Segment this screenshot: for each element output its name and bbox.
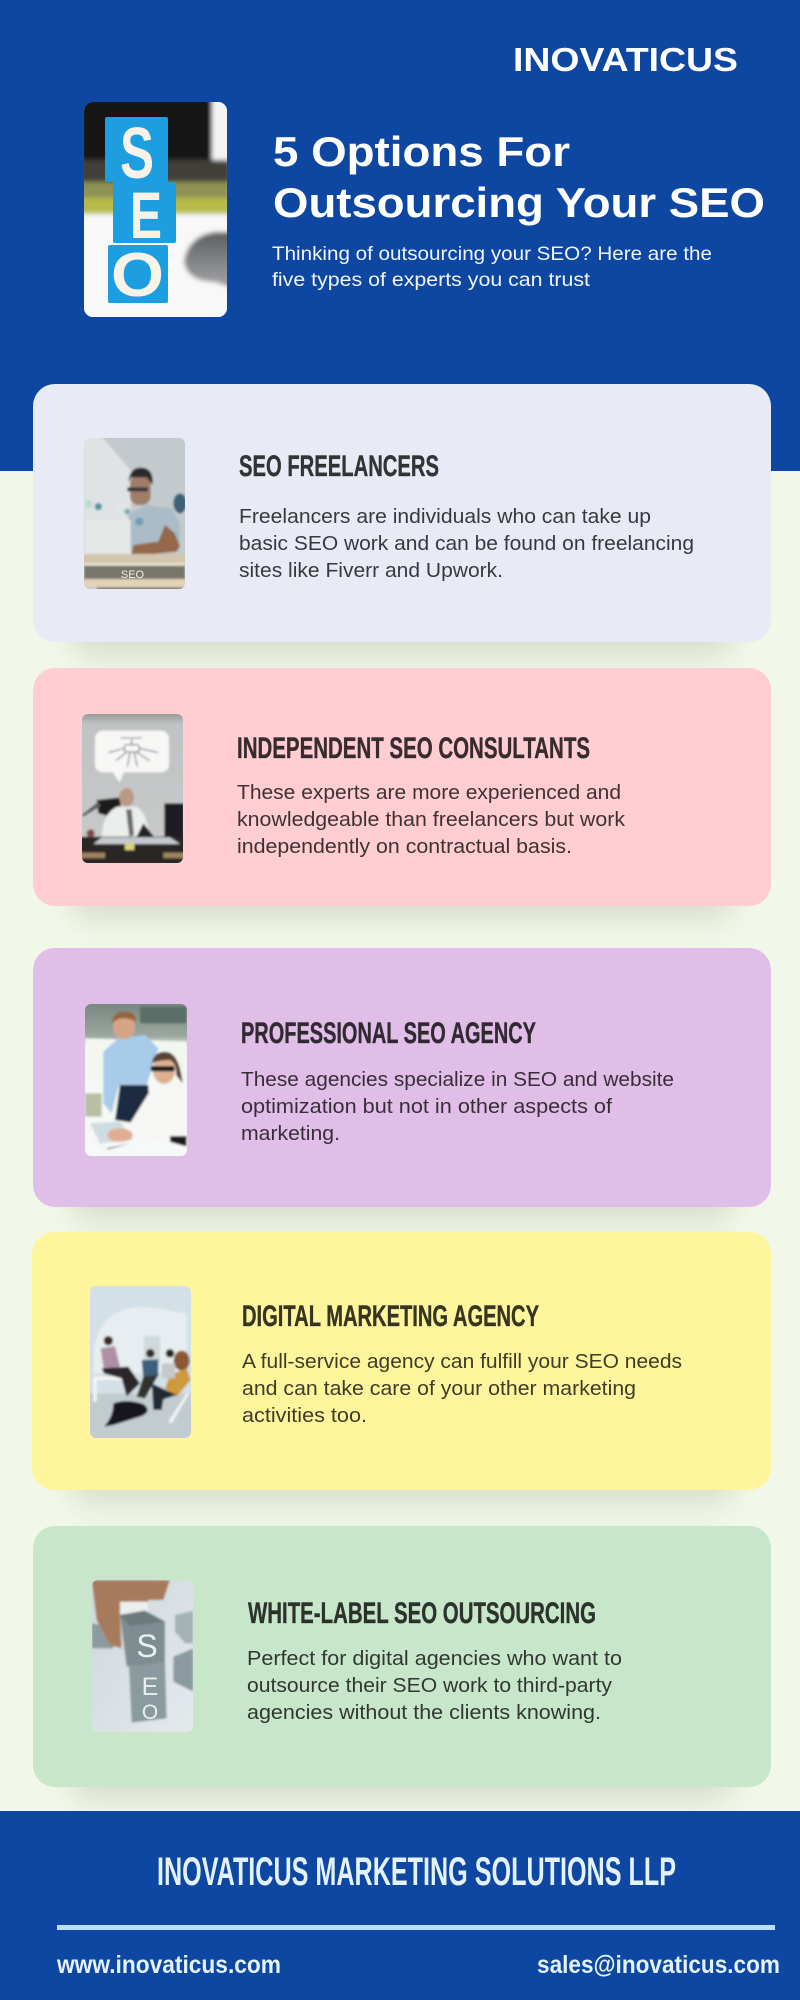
heading: PROFESSIONAL SEO AGENCY (241, 1017, 536, 1050)
hero photo: SEO blocks: S (120, 114, 154, 194)
body text: activities too. (242, 1404, 367, 1427)
heading: INDEPENDENT SEO CONSULTANTS (237, 732, 590, 765)
title: 5 Options For (273, 128, 570, 175)
panel: white-label SEO outsourcing (33, 1526, 771, 1801)
card background (32, 1232, 771, 1490)
footer email: sales@inovaticus.com (537, 1951, 780, 1979)
photo: hand stacking SEO cubes (90, 1578, 195, 1733)
panel: digital marketing agency (32, 1232, 771, 1504)
heading: DIGITAL MARKETING AGENCY (242, 1300, 539, 1333)
photo: freelancer at laptop (84, 438, 185, 589)
footer divider (57, 1925, 775, 1930)
photo: freelancer at laptop: SEO (121, 569, 145, 581)
panel: professional SEO agency (33, 948, 771, 1221)
body text: agencies without the clients knowing. (247, 1701, 601, 1724)
card background (33, 668, 771, 906)
photo: two colleagues with tablet (83, 1002, 188, 1158)
footer band (0, 1811, 800, 2000)
body text: Perfect for digital agencies who want to (247, 1647, 622, 1670)
body text: independently on contractual basis. (237, 835, 572, 858)
hero photo: SEO blocks: E (130, 178, 162, 252)
footer website: www.inovaticus.com (56, 1951, 281, 1979)
photo: hand stacking SEO cubes: S (136, 1628, 158, 1664)
subtitle (272, 243, 712, 291)
photo: hand stacking SEO cubes: O (142, 1701, 158, 1724)
panel: SEO freelancers (33, 384, 771, 656)
hero photo: SEO blocks (80, 98, 232, 320)
body text: knowledgeable than freelancers but work (237, 808, 626, 831)
body text: outsource their SEO work to third-party (247, 1674, 613, 1697)
photo: team meeting in office (88, 1283, 193, 1440)
photo: hand stacking SEO cubes: E (142, 1673, 158, 1701)
body text (237, 781, 626, 858)
body text: A full-service agency can fulfill your SEO needs (242, 1350, 682, 1373)
title (273, 128, 765, 226)
subtitle: Thinking of outsourcing your SEO? Here are the (272, 243, 712, 265)
body text (247, 1647, 622, 1724)
heading: WHITE-LABEL SEO OUTSOURCING (248, 1597, 596, 1630)
heading: SEO FREELANCERS (239, 450, 439, 483)
body text: optimization but not in other aspects of (241, 1095, 612, 1118)
panel: independent SEO consultants (33, 668, 771, 920)
card background (33, 948, 771, 1207)
body text: basic SEO work and can be found on freelancing (239, 532, 694, 555)
body text: marketing. (241, 1122, 340, 1145)
body text (241, 1068, 674, 1145)
body text (239, 505, 694, 582)
hero photo: SEO blocks: O (111, 241, 164, 310)
body text (242, 1350, 682, 1427)
logo: INOVATICUS (513, 41, 738, 78)
subtitle: five types of experts you can trust (272, 269, 591, 291)
body text: These agencies specialize in SEO and website (241, 1068, 674, 1091)
body text: and can take care of your other marketing (242, 1377, 636, 1400)
body text: sites like Fiverr and Upwork. (239, 559, 503, 582)
card background (33, 1526, 771, 1787)
body text: Freelancers are individuals who can take up (239, 505, 651, 528)
photo: consultant at desk (80, 712, 187, 865)
body text: These experts are more experienced and (237, 781, 621, 804)
card background (33, 384, 771, 642)
title: Outsourcing Your SEO (273, 179, 765, 226)
header band (0, 0, 800, 471)
